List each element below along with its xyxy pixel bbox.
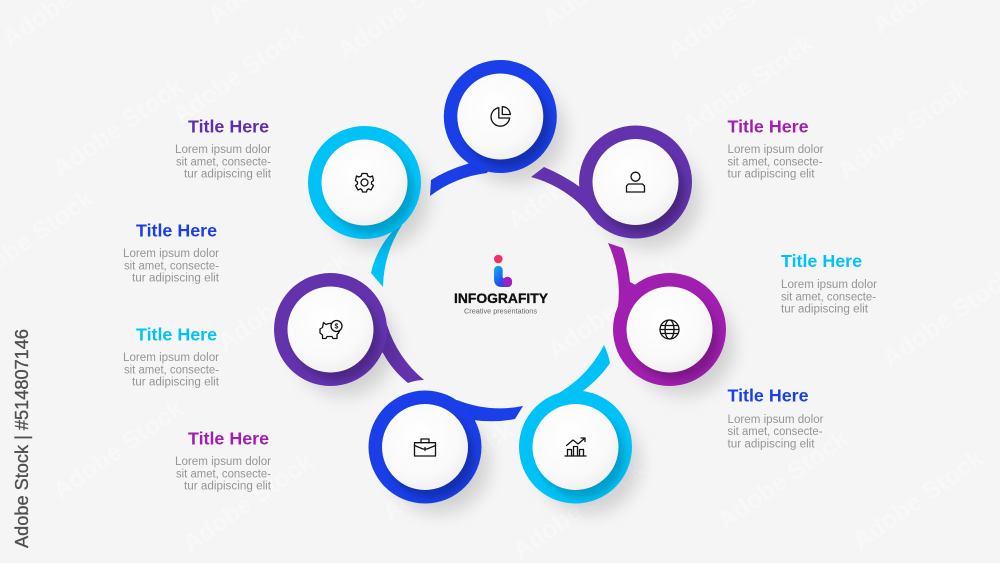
text block: right 2: Title Here <box>781 251 862 271</box>
text block: left 3: tur adipiscing elit <box>132 376 220 388</box>
icon: piggy bank: $ <box>335 324 339 330</box>
icon: gear <box>356 174 374 192</box>
text block: left 2: Title Here <box>136 220 217 240</box>
text block: right 1 <box>728 116 824 180</box>
text block: right 1: Lorem ipsum dolor <box>728 144 824 156</box>
text block: left 3 <box>123 324 220 388</box>
text block: right 2 <box>781 251 877 316</box>
node: piggy bank (left, purple) <box>274 273 424 396</box>
icon: globe <box>660 320 679 339</box>
infographic canvas: Adobe Stock <box>712 424 854 535</box>
infographic canvas: Adobe Stock <box>212 246 354 357</box>
logo mark <box>494 255 512 287</box>
text block: right 3 <box>728 386 824 450</box>
center logo <box>454 255 548 316</box>
text block: right 2: Lorem ipsum dolor <box>781 279 877 291</box>
text block: right 3: Lorem ipsum dolor <box>728 414 824 426</box>
text block: left 4: sit amet, consecte- <box>176 468 271 480</box>
icon: person <box>626 172 644 192</box>
infographic canvas <box>14 60 877 548</box>
infographic canvas: Adobe Stock <box>47 72 189 183</box>
text block: right 1: tur adipiscing elit <box>728 168 815 180</box>
stock id side label: Adobe Stock | #514807146 <box>11 329 32 548</box>
text block: right 3: Title Here <box>728 386 809 406</box>
infographic canvas: Adobe Stock <box>47 394 189 505</box>
infographic canvas: Adobe Stock <box>847 444 989 555</box>
node: growth chart (bottom right, cyan) <box>519 345 640 513</box>
infographic canvas: Adobe Stock <box>167 19 309 130</box>
node: briefcase (bottom left, blue) <box>368 390 523 513</box>
text block: left 3: Title Here <box>136 324 217 344</box>
text block: left 1 <box>175 116 272 180</box>
logo tagline: Creative presentations <box>464 306 537 316</box>
infographic canvas: Adobe Stock <box>502 124 644 235</box>
text block: left 4 <box>175 428 272 492</box>
node: globe (right, magenta) <box>608 243 734 396</box>
text block: right 3: tur adipiscing elit <box>728 438 815 450</box>
text block: right 1: sit amet, consecte- <box>728 156 823 168</box>
text block: left 1: Title Here <box>188 116 269 136</box>
text block: right 3: sit amet, consecte- <box>728 426 823 438</box>
text block: left 4: tur adipiscing elit <box>184 480 272 492</box>
text block: left 1: tur adipiscing elit <box>184 168 272 180</box>
icon: pie chart <box>491 107 510 126</box>
logo wordmark: INFOGRAFITY <box>454 291 548 306</box>
text block: left 3: sit amet, consecte- <box>124 364 219 376</box>
text block: right 1: Title Here <box>728 116 809 136</box>
text block: left 4: Title Here <box>188 428 269 448</box>
node: person (upper right, purple) <box>531 126 700 248</box>
text block: left 4: Lorem ipsum dolor <box>175 456 271 468</box>
text block: left 2: sit amet, consecte- <box>124 260 219 272</box>
node: gear (upper left, cyan) <box>308 126 428 287</box>
text block: left 2 <box>123 220 220 284</box>
text block: right 2: sit amet, consecte- <box>781 292 876 304</box>
infographic canvas: Adobe Stock <box>377 416 519 527</box>
infographic canvas: Adobe Stock <box>507 454 649 563</box>
text block: left 3: Lorem ipsum dolor <box>123 352 219 364</box>
text block: right 2: tur adipiscing elit <box>781 304 869 316</box>
node: pie chart (top, blue) <box>430 60 564 196</box>
infographic canvas: Adobe Stock <box>177 447 319 558</box>
icon: briefcase <box>414 439 436 456</box>
infographic canvas: Adobe Stock <box>677 29 819 140</box>
text block: left 1: sit amet, consecte- <box>176 156 271 168</box>
text block: left 2: tur adipiscing elit <box>132 272 220 284</box>
text block: left 1: Lorem ipsum dolor <box>175 144 271 156</box>
infographic canvas: Adobe Stock <box>542 254 684 365</box>
infographic canvas: Adobe Stock <box>832 74 974 185</box>
text block: left 2: Lorem ipsum dolor <box>123 248 219 260</box>
icon: growth chart <box>565 438 586 456</box>
